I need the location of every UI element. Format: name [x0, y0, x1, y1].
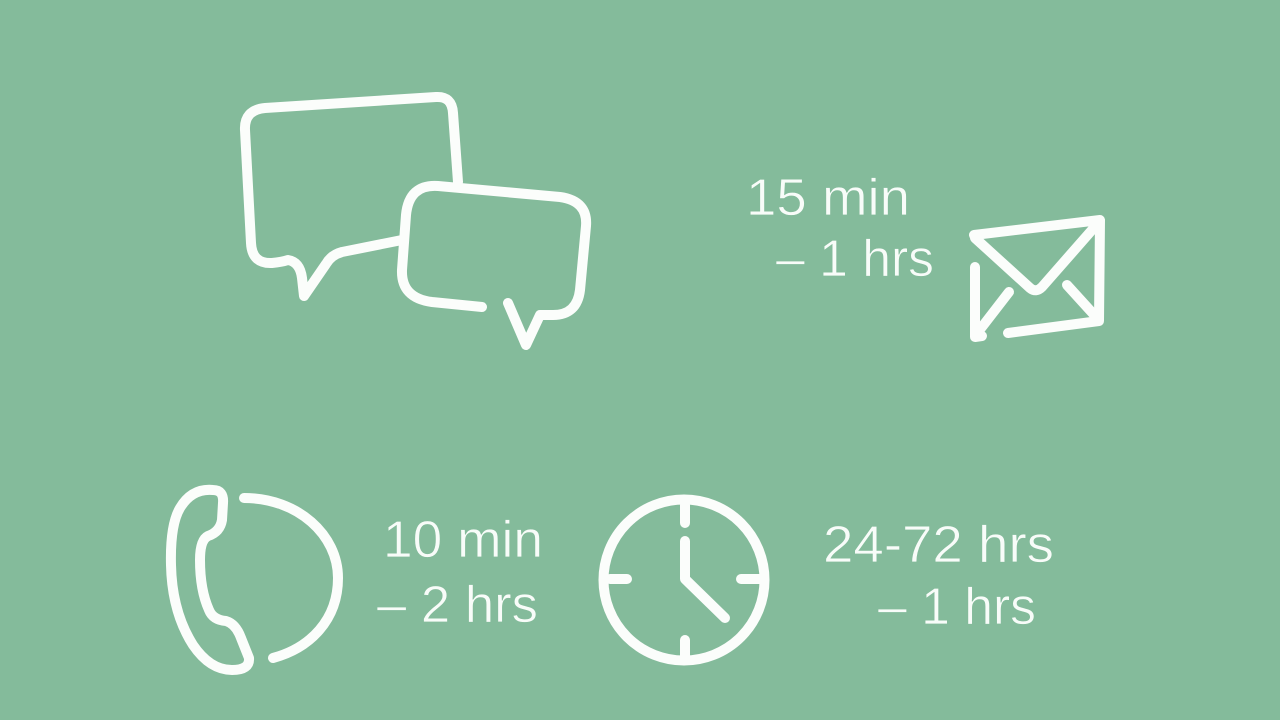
text: 10 min: 10 min: [383, 511, 543, 569]
icon: envelope: [974, 220, 1100, 337]
icon: clock: [604, 500, 764, 660]
icon: phone: [171, 490, 338, 670]
text: 1 hrs: – 1 hrs: [776, 230, 934, 288]
text: 15 min: 15 min: [746, 169, 910, 227]
text: 1 hrs: – 1 hrs: [878, 578, 1036, 636]
icon: chat bubbles: [245, 97, 586, 345]
text: 24-72 hrs: 24-72 hrs: [823, 516, 1054, 574]
text: 2 hrs: – 2 hrs: [377, 576, 538, 634]
